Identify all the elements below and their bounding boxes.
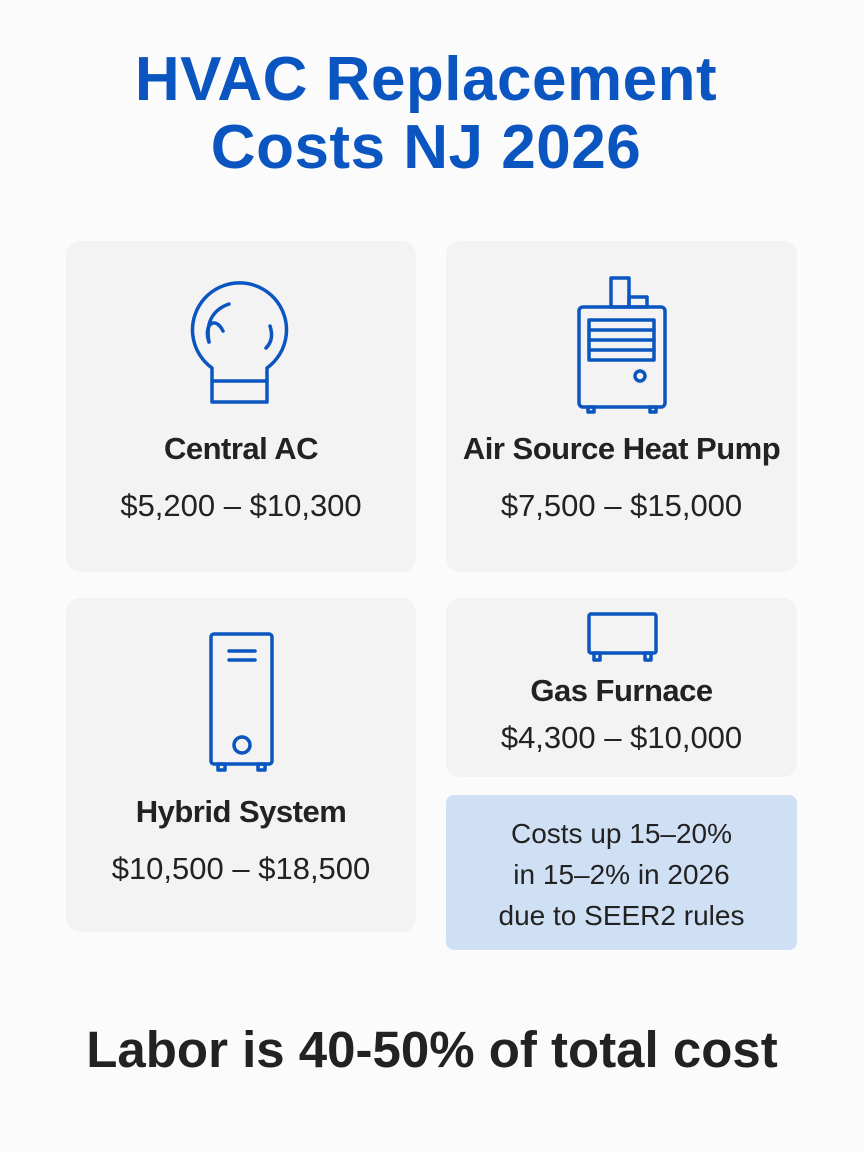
title: HVAC Replacement	[135, 45, 717, 114]
icon: heat pump	[579, 278, 665, 412]
footer: labor: Labor is 40-50% of total cost	[86, 1021, 778, 1078]
title: Costs NJ 2026	[211, 113, 641, 182]
icon: hybrid	[211, 634, 272, 770]
icon: bulb	[192, 283, 286, 402]
panel: heat pump	[446, 241, 797, 572]
panel: hybrid	[66, 598, 416, 932]
price: hybrid: $10,500 – $18,500	[112, 851, 370, 886]
title	[135, 45, 717, 182]
name: hybrid: Hybrid System	[136, 794, 346, 829]
panel: central AC	[66, 241, 416, 572]
callout: Costs up 15–20%	[511, 818, 732, 849]
name: central AC: Central AC	[164, 431, 318, 466]
callout: in 15–2% in 2026	[513, 859, 730, 890]
price: central AC: $5,200 – $10,300	[120, 488, 362, 523]
callout: due to SEER2 rules	[499, 900, 744, 931]
panel: gas furnace	[446, 598, 797, 777]
callout	[446, 795, 797, 950]
price: heat pump: $7,500 – $15,000	[501, 488, 742, 523]
price: gas furnace: $4,300 – $10,000	[501, 720, 742, 755]
icon: furnace	[589, 614, 656, 660]
name: gas furnace: Gas Furnace	[530, 673, 713, 708]
name: heat pump: Air Source Heat Pump	[463, 431, 780, 466]
